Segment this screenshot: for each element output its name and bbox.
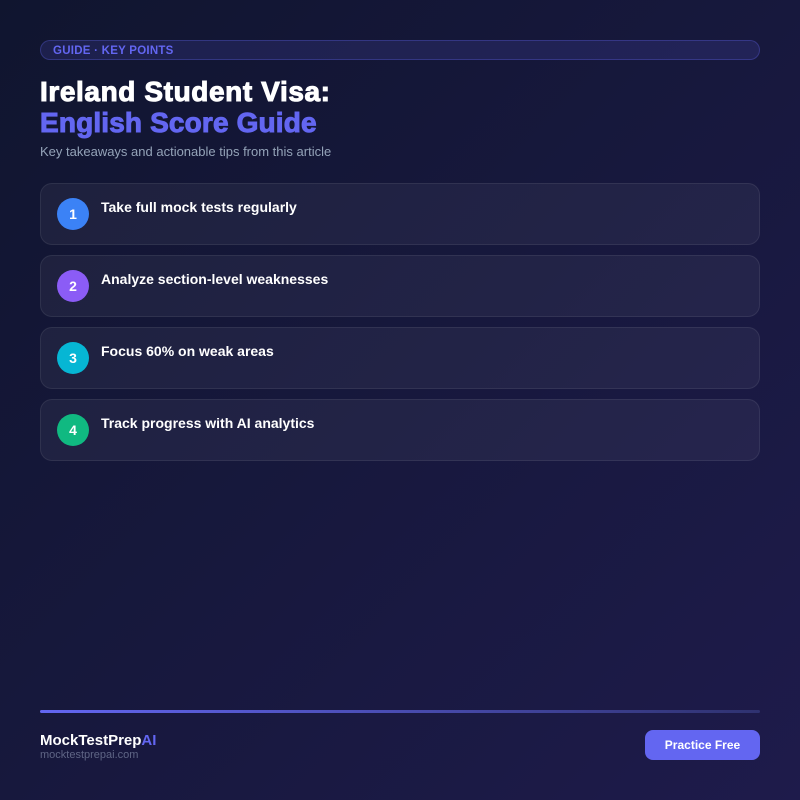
call-to-action button: Practice Free [665,738,740,752]
title line 1: Ireland Student Visa: [40,76,331,107]
step 2 text: Analyze section-level weaknesses [101,271,328,287]
step 4 text: Track progress with AI analytics [101,415,314,431]
panel: step 4 [40,399,760,461]
badge label: GUIDE · KEY POINTS [53,45,174,57]
step 1 text: Take full mock tests regularly [101,199,297,215]
number badge 2: 2 [69,278,77,294]
accent bar [40,710,760,713]
title [40,76,331,138]
number badge 4: 4 [69,422,77,438]
number badge 1: 1 [69,206,77,222]
number badge 4 [57,414,89,446]
brand block [40,732,156,761]
number badge 3 [57,342,89,374]
call-to-action button [645,730,760,760]
number badge 1 [57,198,89,230]
panel: step 3 [40,327,760,389]
panel: step 1 [40,183,760,245]
subtitle: Key takeaways and actionable tips from this article [40,144,331,159]
brand name: MockTestPrepAI [40,732,156,749]
brand url: mocktestprepai.com [40,749,138,761]
title line 2: English Score Guide [40,107,317,138]
step 3 text: Focus 60% on weak areas [101,343,274,359]
number badge 2 [57,270,89,302]
panel: step 2 [40,255,760,317]
number badge 3: 3 [69,350,77,366]
badge: guide key points [40,40,760,60]
